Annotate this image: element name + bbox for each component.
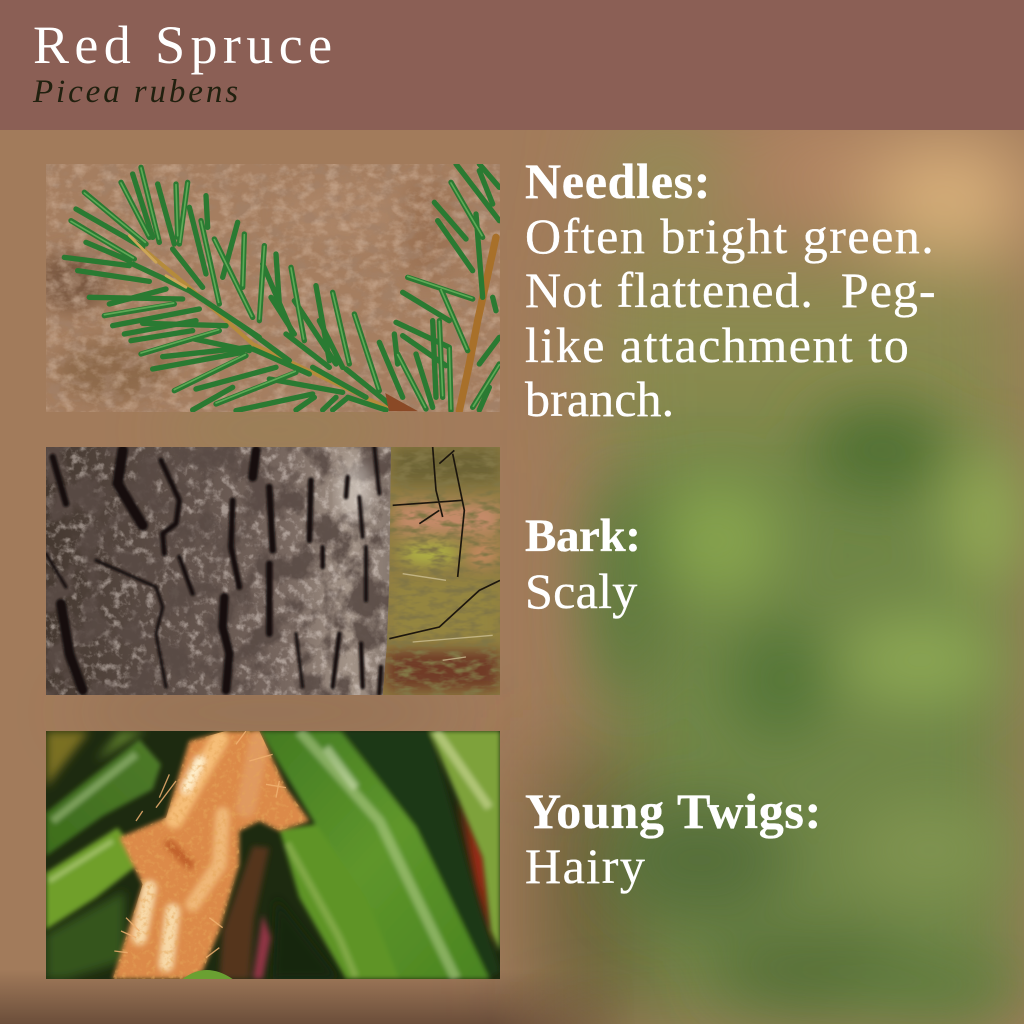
text: needles xyxy=(524,153,937,427)
text: needles: Needles: xyxy=(525,153,711,209)
trunk xyxy=(46,447,391,695)
text: young twigs: Young Twigs: xyxy=(525,783,822,839)
text: young twigs: Hairy xyxy=(525,838,646,894)
forest background xyxy=(382,447,500,695)
text: needles: branch. xyxy=(525,371,674,427)
text: needles: Not flattened. Peg- xyxy=(525,262,937,318)
scientific name: Picea rubens xyxy=(33,74,241,110)
text: bark: Bark: xyxy=(525,510,641,562)
text: needles: Often bright green. xyxy=(525,208,935,264)
text: bark xyxy=(525,510,641,619)
twig with hairs xyxy=(219,846,271,979)
text: needles: like attachment to xyxy=(525,317,910,373)
text: bark: Scaly xyxy=(525,563,638,619)
photo: bark xyxy=(46,447,500,695)
title: Red Spruce xyxy=(33,15,337,75)
header band xyxy=(0,0,1024,130)
needles: right xyxy=(259,731,500,979)
needle: upper left xyxy=(46,739,161,929)
photo: needles xyxy=(46,164,500,412)
spruce branch xyxy=(64,164,499,411)
photo: young twigs xyxy=(46,731,500,979)
text: young twigs xyxy=(525,783,822,894)
